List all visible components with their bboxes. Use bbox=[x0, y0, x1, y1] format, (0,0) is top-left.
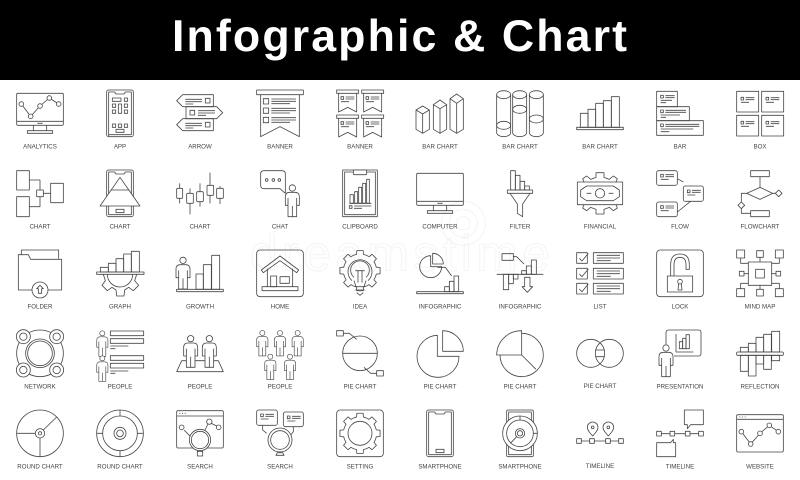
label: pie chart split: PIE CHART bbox=[344, 384, 377, 391]
icon: filter bbox=[507, 171, 533, 217]
label: folder: FOLDER bbox=[28, 304, 53, 311]
label: timeline pins: TIMELINE bbox=[586, 463, 614, 470]
label: clipboard: CLIPBOARD bbox=[342, 224, 378, 231]
label: pie chart slice: PIE CHART bbox=[424, 384, 457, 391]
icon: pie chart wedge bbox=[497, 331, 543, 377]
watermark bbox=[250, 201, 550, 282]
label: setting: SETTING bbox=[347, 464, 374, 471]
label: people pair: PEOPLE bbox=[188, 384, 212, 391]
label: bar chart prisms: BAR CHART bbox=[422, 144, 458, 151]
icon: search messages bbox=[257, 410, 303, 455]
label: mind map: MIND MAP bbox=[745, 304, 775, 311]
label: timeline messages: TIMELINE bbox=[666, 464, 694, 471]
icon: infographic pie bbox=[417, 253, 463, 294]
label: chart pyramid: CHART bbox=[109, 224, 131, 231]
label: round chart spokes: ROUND CHART bbox=[17, 464, 63, 471]
label: chart tree: CHART bbox=[29, 224, 51, 231]
icon: graph bbox=[97, 251, 144, 296]
icon: bar chart bbox=[577, 97, 623, 130]
label: bar: BAR bbox=[674, 144, 687, 151]
icon: banner bbox=[257, 90, 303, 137]
icon: timeline pins bbox=[577, 422, 623, 443]
icon: flowchart bbox=[738, 171, 782, 217]
icon: banner set bbox=[337, 90, 384, 137]
label: people group: PEOPLE bbox=[268, 384, 292, 391]
label: search browser: SEARCH bbox=[187, 464, 213, 471]
label: analytics: ANALYTICS bbox=[23, 144, 57, 151]
watermark: dreamstime bbox=[250, 226, 550, 282]
label: home: HOME bbox=[271, 304, 289, 311]
icon: chart tree bbox=[17, 171, 63, 217]
label: bar chart: BAR CHART bbox=[582, 144, 618, 151]
icon: setting bbox=[337, 410, 383, 457]
label: smartphone: SMARTPHONE bbox=[418, 464, 462, 471]
icon: computer bbox=[417, 173, 463, 213]
icon: growth bbox=[176, 255, 223, 292]
label: banner set: BANNER bbox=[347, 144, 373, 151]
icon: lock bbox=[657, 250, 703, 297]
label: idea: IDEA bbox=[353, 304, 368, 311]
label: presentation: PRESENTATION bbox=[657, 384, 703, 391]
label: website: WEBSITE bbox=[746, 464, 774, 471]
label: people list: PEOPLE bbox=[108, 384, 132, 391]
icon: reflection bbox=[737, 331, 783, 376]
label: lock: LOCK bbox=[672, 304, 689, 311]
icon grid bbox=[16, 90, 784, 471]
icons: row 5, left half bbox=[17, 410, 383, 471]
label: chat: CHAT bbox=[272, 224, 288, 231]
icon: network bbox=[16, 330, 64, 377]
icon: home bbox=[257, 250, 303, 297]
label: network: NETWORK bbox=[24, 384, 57, 391]
icon: mind map bbox=[737, 250, 783, 297]
label: banner: BANNER bbox=[267, 144, 293, 151]
label: round chart rings: ROUND CHART bbox=[97, 464, 143, 471]
icon: bar bbox=[657, 91, 703, 135]
label: smartphone dial: SMARTPHONE bbox=[498, 464, 542, 471]
icon: box bbox=[737, 91, 784, 136]
icon: smartphone dial bbox=[503, 410, 537, 457]
label: search messages: SEARCH bbox=[267, 464, 293, 471]
label: pie chart venn: PIE CHART bbox=[584, 383, 617, 390]
label: reflection: REFLECTION bbox=[740, 384, 780, 391]
icon: flow bbox=[657, 171, 703, 217]
icon: timeline messages bbox=[657, 410, 703, 457]
icon: list bbox=[577, 253, 623, 294]
icon: search browser bbox=[177, 411, 223, 456]
label: infographic pie: INFOGRAPHIC bbox=[419, 304, 462, 311]
icons: rows 1-2, left half bbox=[17, 90, 384, 231]
icon: app bbox=[107, 90, 133, 137]
icon: people group bbox=[257, 330, 303, 380]
icon: candlestick chart bbox=[177, 173, 223, 214]
icon: bar chart cylinders bbox=[497, 91, 543, 137]
icon: clipboard bbox=[343, 170, 377, 217]
icons: row 5, right half bbox=[418, 410, 783, 471]
label: growth: GROWTH bbox=[186, 304, 214, 311]
icon: pie chart slice bbox=[417, 331, 463, 377]
icon: pie chart split bbox=[337, 331, 383, 376]
label: graph: GRAPH bbox=[109, 304, 131, 311]
icon: folder bbox=[18, 250, 62, 298]
label: app: APP bbox=[114, 144, 126, 151]
label: candlestick chart: CHART bbox=[189, 224, 211, 231]
icons: rows 3-4, left half bbox=[16, 250, 383, 391]
icon: pie chart venn bbox=[577, 339, 623, 367]
icon: round chart spokes bbox=[17, 410, 63, 457]
icon: presentation bbox=[659, 330, 701, 377]
label: computer: COMPUTER bbox=[422, 224, 458, 231]
icon: idea bbox=[340, 251, 380, 295]
label: pie chart wedge: PIE CHART bbox=[504, 384, 537, 391]
label: list: LIST bbox=[593, 304, 607, 311]
label: bar chart cylinders: BAR CHART bbox=[502, 144, 538, 151]
icon: analytics bbox=[17, 93, 63, 133]
icons: rows 1-2, right half bbox=[416, 91, 784, 231]
icon: smartphone bbox=[427, 410, 453, 457]
icon: infographic bars bbox=[497, 254, 543, 292]
icon: bar chart prisms bbox=[416, 94, 463, 133]
icon: chart pyramid bbox=[100, 170, 140, 217]
label: flow: FLOW bbox=[671, 224, 689, 231]
icon: chat bbox=[261, 171, 299, 217]
icons: rows 3-4, right half bbox=[417, 250, 783, 391]
label: arrow: ARROW bbox=[188, 144, 212, 151]
icon: financial bbox=[577, 173, 623, 214]
label: financial: FINANCIAL bbox=[584, 224, 617, 231]
label: flowchart: FLOWCHART bbox=[741, 224, 780, 231]
label: infographic bars: INFOGRAPHIC bbox=[499, 304, 542, 311]
icon: people list bbox=[97, 331, 144, 381]
icon: arrow bbox=[177, 95, 223, 131]
label: box: BOX bbox=[753, 144, 767, 151]
icon: people pair bbox=[177, 336, 223, 372]
header band bbox=[0, 0, 800, 80]
label: filter: FILTER bbox=[510, 224, 531, 231]
icon: website bbox=[737, 415, 783, 452]
icon: round chart rings bbox=[97, 410, 143, 457]
title: Infographic & Chart bbox=[172, 12, 627, 61]
